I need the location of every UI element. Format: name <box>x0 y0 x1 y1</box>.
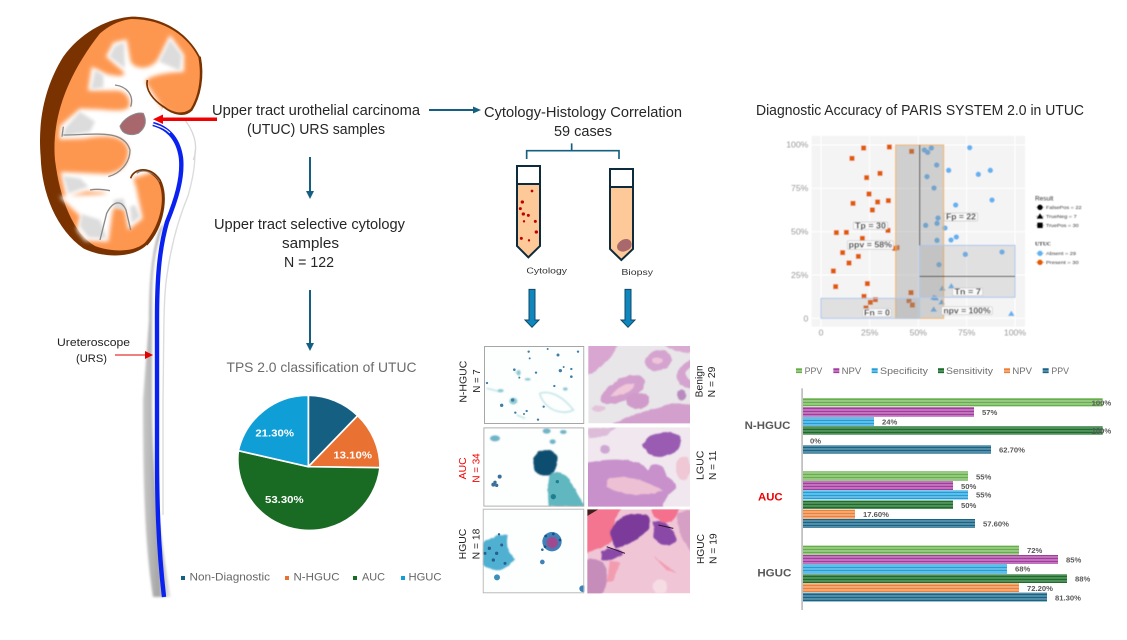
kidney illustration <box>40 17 213 255</box>
kidney parenchyma <box>54 19 200 250</box>
scatter legend <box>1035 196 1082 266</box>
axis labels: 75% <box>791 183 809 193</box>
axis labels: 25% <box>861 328 879 338</box>
pie chart: 13.10% <box>333 451 372 462</box>
annotation labels <box>847 212 992 317</box>
ppv and npv band <box>896 145 944 318</box>
axis labels: 75% <box>958 328 976 338</box>
annotation labels: Fn = 0 <box>864 307 890 317</box>
axis labels: 0 <box>819 328 824 338</box>
label: LGUC: LGUC <box>695 451 706 480</box>
arrow: cytology down <box>525 289 539 327</box>
category labels <box>745 420 791 580</box>
bar value labels: 72.20% <box>1027 584 1053 593</box>
scatter plot <box>786 136 1082 338</box>
label: benign <box>694 365 718 397</box>
annotation labels: Tp = 30 <box>855 220 886 230</box>
text: UTUC URS samples: Upper tract urothelial carcinoma <box>212 103 421 119</box>
renal sinus <box>59 35 213 242</box>
cytology image: AUC <box>483 427 584 507</box>
bracket <box>527 143 619 159</box>
pie legend: HGUC <box>408 572 442 584</box>
calyces <box>63 40 182 238</box>
bar value labels: 88% <box>1075 575 1091 584</box>
bar value labels: 50% <box>961 482 977 491</box>
category labels: AUC <box>758 492 783 504</box>
bar value labels: 17.60% <box>863 510 889 519</box>
bar value labels: 55% <box>976 473 992 482</box>
pie legend: Non-Diagnostic <box>190 572 271 584</box>
true negative band <box>920 245 1015 297</box>
bar legend: PPV <box>1051 366 1069 376</box>
chart title: TPS classification: TPS 2.0 classification of UTUC <box>226 359 416 375</box>
bar value labels: 50% <box>961 501 977 510</box>
label: HGUC histology: HGUC <box>696 534 707 564</box>
scatter legend: TruePos = 30 <box>1046 223 1079 229</box>
label: AUC: N = 34 <box>471 453 482 483</box>
calyx shadow lines <box>62 85 160 240</box>
label: biopsy: Biopsy <box>621 267 654 277</box>
axis labels: 25% <box>791 270 809 280</box>
arrow: to pie chart <box>306 290 314 351</box>
scatter legend: Result <box>1035 196 1054 202</box>
scatter legend: FalsePos = 22 <box>1046 205 1082 211</box>
bar value labels: 68% <box>1015 565 1031 574</box>
bar value labels: 24% <box>882 418 898 427</box>
true positive points <box>831 144 915 311</box>
micrograph grid <box>458 343 720 597</box>
tumour <box>120 113 145 135</box>
scatter legend: TrueNeg = 7 <box>1046 214 1077 220</box>
tube: cytology <box>517 166 540 257</box>
label: benign: Benign <box>694 365 705 397</box>
annotation labels: Tn = 7 <box>954 287 981 297</box>
pie chart: 21.30% <box>255 429 294 440</box>
bar legend: PPV <box>805 366 822 376</box>
kidney capsule <box>40 17 202 255</box>
annotation labels: Fp = 22 <box>946 212 976 222</box>
label: LGUC: N = 11 <box>708 450 719 480</box>
axis labels: 100% <box>1004 328 1026 338</box>
pie legend <box>181 572 442 584</box>
label: N-HGUC: N = 7 <box>472 369 483 393</box>
hilum sheath <box>185 120 196 160</box>
bar value labels: 100% <box>1092 399 1111 408</box>
label: AUC <box>458 453 482 483</box>
pie chart: 53.30% <box>265 495 304 506</box>
bar legend <box>796 366 1069 376</box>
threshold lines <box>920 145 1015 276</box>
bars: N-HGUC <box>803 398 1103 454</box>
bar value labels: 0% <box>810 437 821 446</box>
pie legend: N-HGUC <box>294 572 340 584</box>
text: selective cytology samples: Upper tract selective cytology <box>214 217 406 233</box>
label: HGUC cytology <box>458 528 482 559</box>
annotation labels: ppv = 58% <box>849 240 893 250</box>
bar value labels: 85% <box>1066 556 1082 565</box>
arrow: to correlation <box>429 106 481 114</box>
bar legend: NPV <box>842 366 861 376</box>
bar legend: NPV <box>1012 366 1032 376</box>
scatter legend: UTUC <box>1035 241 1051 247</box>
histology image: HGUC <box>587 509 690 594</box>
text: UTUC URS samples <box>212 103 421 138</box>
pie legend: AUC <box>362 572 385 584</box>
label: HGUC histology: N = 19 <box>709 533 720 564</box>
bar value labels: 55% <box>976 491 992 500</box>
cytology image: N-HGUC <box>484 346 584 424</box>
chart axis <box>801 388 803 610</box>
text: correlation heading <box>484 105 682 140</box>
ureteroscope line <box>153 124 181 597</box>
label: N-HGUC: N-HGUC <box>459 361 470 403</box>
arrow: to selective cytology <box>306 157 314 199</box>
cytology image: HGUC <box>483 509 586 593</box>
label: N-HGUC <box>459 361 483 403</box>
false positive points <box>922 145 1005 267</box>
histology image: LGUC <box>585 427 691 510</box>
text: selective cytology samples: N = 122 <box>284 255 334 271</box>
scatter legend: Present = 30 <box>1046 260 1079 266</box>
label: HGUC histology <box>696 533 720 564</box>
tube: biopsy <box>610 169 633 260</box>
label: cytology: Cytology <box>526 266 568 276</box>
tubes and specimen flow <box>517 143 654 327</box>
text: selective cytology samples <box>214 217 406 271</box>
true negative points <box>930 283 1015 316</box>
scatter legend: Absent = 29 <box>1046 251 1076 257</box>
axis labels: 0 <box>804 313 809 323</box>
ureter sheath <box>143 125 195 597</box>
label: HGUC cytology: HGUC <box>458 529 469 559</box>
axis labels: 100% <box>786 140 809 150</box>
bar value labels: 62.70% <box>999 446 1025 455</box>
annotation labels: npv = 100% <box>943 305 991 315</box>
bar legend: Specificity <box>880 366 929 376</box>
label: benign: N = 29 <box>707 366 718 397</box>
plot background <box>812 136 1025 327</box>
label: AUC: AUC <box>458 457 469 479</box>
bar value labels <box>810 399 1111 603</box>
axis labels: 50% <box>791 226 809 236</box>
text: UTUC URS samples: (UTUC) URS samples <box>247 122 385 138</box>
category labels: HGUC <box>757 568 791 580</box>
false negative band <box>821 298 920 318</box>
axis labels <box>786 140 1026 338</box>
bar value labels: 72% <box>1027 546 1043 555</box>
bar value labels: 57% <box>982 408 998 417</box>
bars: AUC <box>803 471 975 528</box>
bar value labels: 81.30% <box>1055 594 1081 603</box>
label: ureteroscope: (URS) <box>76 353 107 365</box>
heading: diagnostic accuracy: Diagnostic Accuracy of PARIS SYSTEM 2.0 in UTUC <box>756 103 1084 119</box>
category labels: N-HGUC <box>745 420 790 432</box>
arrow: tumour pointer <box>153 114 217 124</box>
histology image: benign <box>588 346 690 424</box>
pie chart <box>238 395 380 531</box>
bar value labels: 100% <box>1092 427 1111 436</box>
arrow: ureteroscope pointer <box>115 351 153 359</box>
axis labels: 50% <box>910 328 927 338</box>
label: HGUC cytology: N = 18 <box>471 528 482 559</box>
arrow: biopsy down <box>621 289 635 327</box>
label: ureteroscope <box>57 337 130 365</box>
bars: HGUC <box>803 545 1067 602</box>
label: ureteroscope: Ureteroscope <box>57 337 130 349</box>
bar value labels: 57.60% <box>983 520 1009 529</box>
bar legend: Sensitivity <box>946 366 994 376</box>
text: selective cytology samples: samples <box>282 236 339 252</box>
lobe outlines <box>131 57 202 245</box>
bar chart <box>745 366 1111 610</box>
label: LGUC <box>695 450 719 480</box>
text: correlation heading: Cytology-Histology Correlation <box>484 105 682 121</box>
text: correlation heading: 59 cases <box>554 124 612 140</box>
